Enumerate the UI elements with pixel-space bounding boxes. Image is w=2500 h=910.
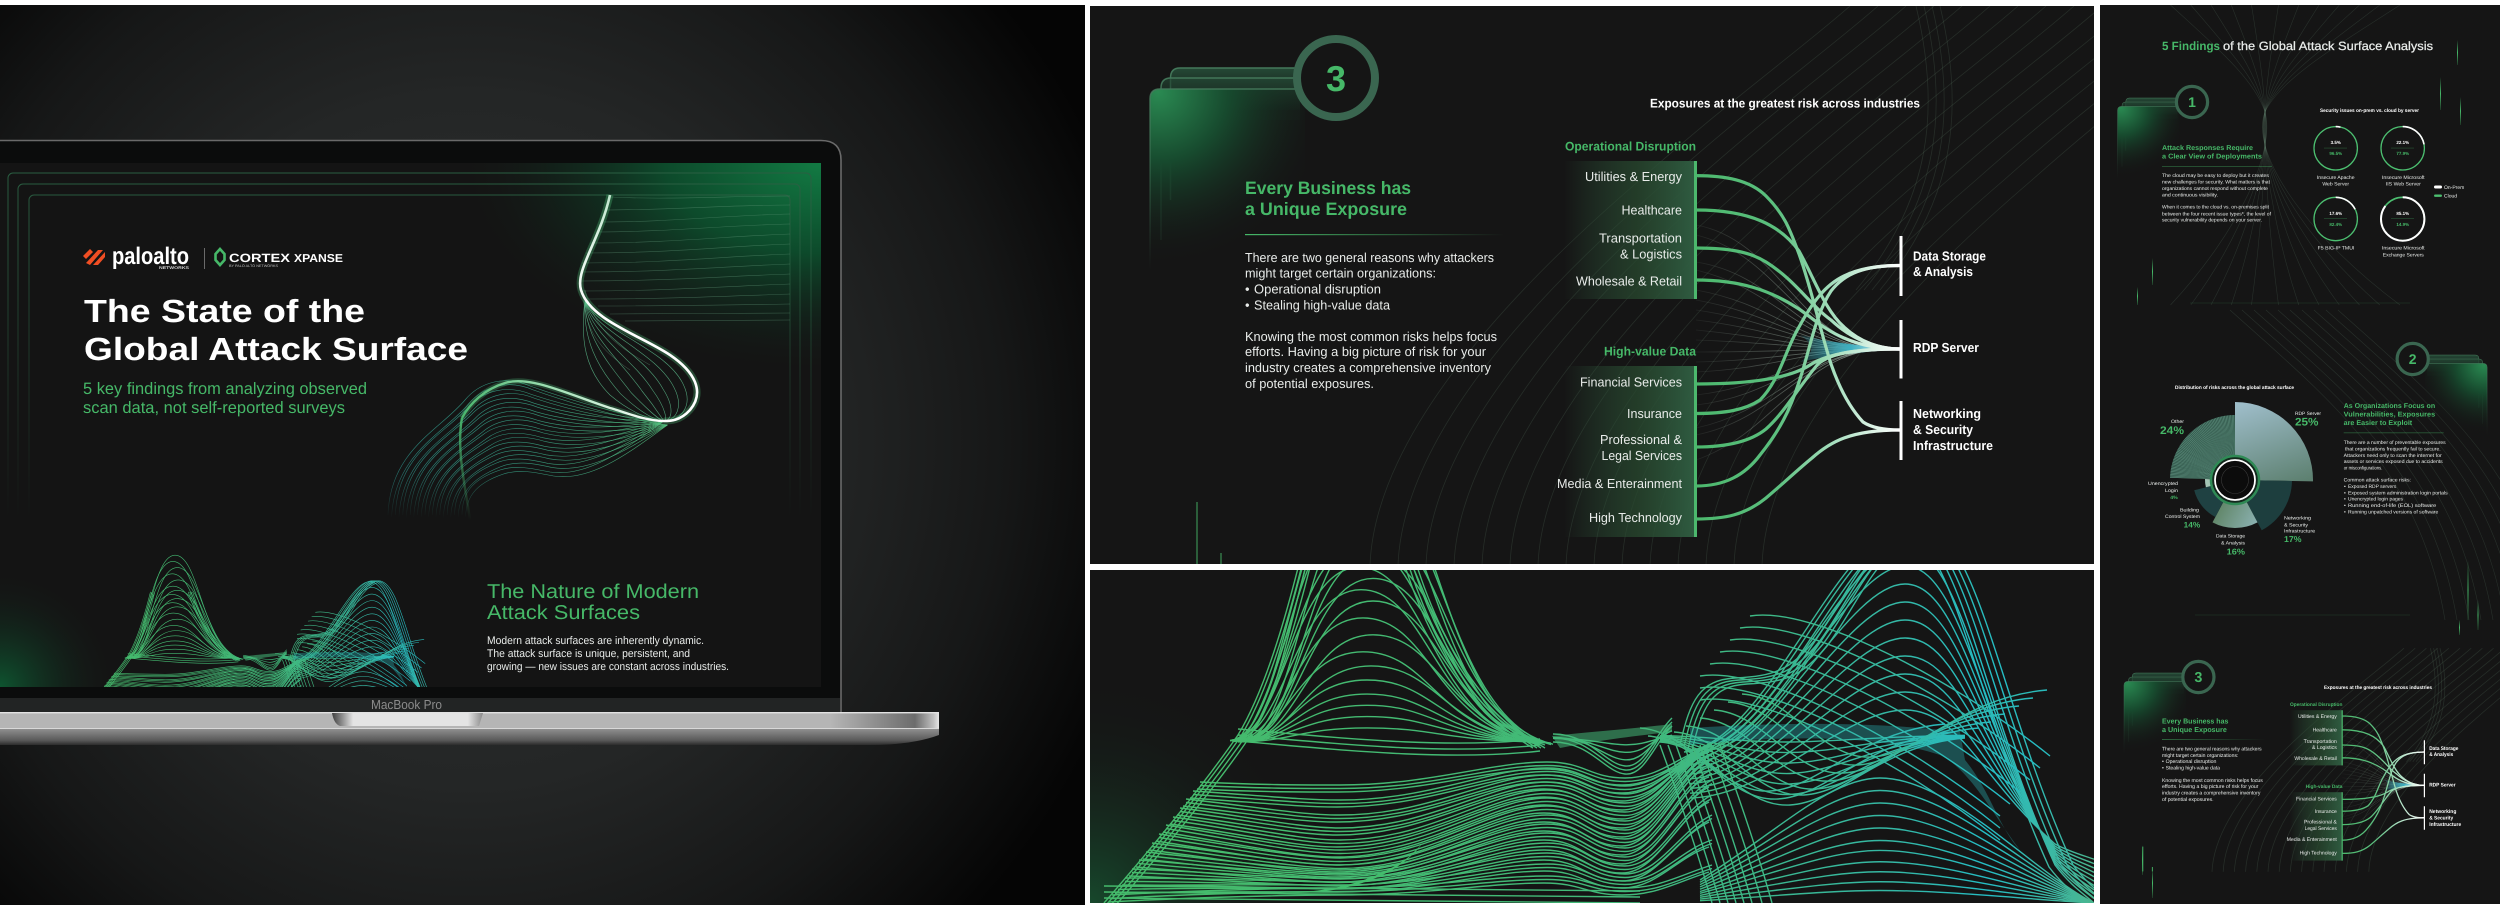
polar label: data storage [2216, 534, 2246, 556]
heading: every business: a Unique Exposure [1245, 199, 1407, 219]
exposure labels: Data Storage [1913, 248, 1986, 264]
polar label: unencrypted login: 4% [2170, 495, 2179, 501]
number 2: 2 [2409, 351, 2417, 367]
laptop lid [0, 140, 841, 714]
logo: cortex xpanse: CORTEX [229, 251, 290, 265]
subtitle [83, 380, 367, 417]
finding 2 body [2344, 440, 2448, 515]
finding 2 body: that organizations frequently fail to secure. [2345, 447, 2441, 453]
logo: paloalto networks: NETWORKS [159, 265, 189, 270]
finding 3 text in summary: Media & Enterainment [2287, 836, 2337, 842]
polar label: other: Other [2171, 419, 2184, 425]
legend: Cloud [2444, 194, 2457, 200]
heading: every business [1245, 178, 1411, 219]
finding 2 body: Unencrypted login pages [2348, 497, 2403, 503]
finding 2 divider [2344, 432, 2444, 434]
donut: apache: Insecure Apache [2317, 175, 2355, 181]
title: The State of the [84, 293, 365, 329]
exposure labels: RDP Server [1913, 340, 1979, 355]
laptop base [0, 712, 939, 745]
finding 2 body: Common attack surface risks: [2344, 478, 2411, 484]
finding 3 text in summary: & Logistics [2312, 744, 2337, 750]
number 1: 1 [2188, 94, 2196, 110]
faint background curves [1196, 6, 2094, 564]
nested screen frames [8, 172, 812, 482]
donut: iis [2381, 127, 2425, 188]
polar label: networking [2284, 516, 2315, 544]
finding 2 body: Running end-of-life (EOL) software [2348, 503, 2437, 509]
finding 1 body: security vulnerability depends on your server. [2162, 218, 2262, 224]
finding 2 body: There are a number of preventable exposures [2344, 440, 2446, 446]
finding 1 body: organizations cannot respond without complete [2162, 186, 2268, 192]
finding 1 body: The cloud may be easy to deploy but it creates [2162, 173, 2270, 179]
polar label: unencrypted login [2148, 481, 2179, 501]
industry labels: high-value data: Professional & [1600, 432, 1682, 447]
logo: cortex xpanse: BY PALO ALTO NETWORKS [229, 264, 279, 268]
heading: every business: Every Business has [1245, 178, 1411, 198]
finding 3 text in summary: Exposures at the greatest risk across industries [2324, 684, 2432, 690]
industry labels: operational disruption: Utilities & Energy [1585, 169, 1682, 184]
finding 2 body: Attackers need only to scan the internet for [2344, 453, 2442, 459]
summary title: 5 Findings [2162, 39, 2220, 53]
body text: of potential exposures. [1245, 376, 1374, 391]
finding 3 text in summary: Stealing high-value data [2166, 765, 2220, 771]
logo: cortex xpanse: XPANSE [294, 253, 343, 265]
logo: cortex xpanse [216, 249, 343, 268]
divider [1245, 234, 1503, 235]
donut: f5: F5 BIG-IP TMUI [2318, 246, 2354, 252]
vertical accent lines [2137, 40, 2478, 898]
finding 3 text in summary: High-value Data [2306, 784, 2343, 789]
body text: might target certain organizations: [1245, 266, 1436, 280]
polar label: other: 24% [2160, 425, 2184, 437]
finding 3 text in summary: • [2162, 765, 2164, 771]
donut charts title: Security issues on-prem vs. cloud by server [2320, 108, 2419, 114]
body text: nature of attack surfaces: Modern attack surfaces are inherently dynamic. [487, 635, 704, 647]
heading: nature of modern attack surfaces: The Nature of Modern [487, 581, 699, 603]
finding 3 text in summary: Utilities & Energy [2298, 713, 2337, 719]
summary title continuation: of the Global Attack Surface Analysis [2223, 39, 2433, 53]
finding 3 text in summary: & Analysis [2429, 751, 2453, 757]
industry labels: high-value data [1557, 374, 1682, 525]
polar label: building control system: Control System [2165, 514, 2200, 520]
polar label: building control system: 14% [2184, 521, 2200, 530]
finding 1 heading [2162, 144, 2262, 160]
finding 3 text in summary: Insurance [2315, 808, 2337, 814]
polar label: rdp server: RDP Server [2295, 411, 2321, 417]
finding 3 text in summary: efforts. Having a big picture of risk for your [2162, 783, 2259, 789]
donut: iis: 22.1% [2396, 140, 2409, 145]
finding 2 body: Exposed system administration login portals [2348, 490, 2448, 496]
donut: iis: Insecure Microsoft [2382, 175, 2425, 181]
donut: iis: 77.9% [2396, 151, 2409, 156]
ribbon wave art [380, 195, 790, 522]
body text: industry creates a comprehensive inventory [1245, 360, 1491, 375]
body text: • [1245, 282, 1250, 296]
mountain wave art on screen [79, 555, 448, 719]
donut: apache: 3.5% [2331, 140, 2341, 145]
finding 2 body: • [2344, 490, 2346, 496]
donut: f5 [2314, 197, 2357, 252]
finding 3 text in summary: Healthcare [2313, 727, 2337, 733]
polar label: rdp server [2295, 411, 2321, 428]
finding 3 art in summary [2124, 648, 2500, 872]
polar label: networking: 17% [2284, 534, 2302, 544]
finding 3 text in summary: There are two general reasons why attackers [2162, 746, 2262, 752]
polar label: unencrypted login: Unencrypted [2148, 481, 2178, 487]
subtitle: scan data, not self-reported surveys [83, 399, 345, 417]
group label: operational disruption: Operational Disruption [1565, 140, 1696, 154]
finding 3 text in summary: Operational disruption [2166, 758, 2216, 764]
finding 1 divider [2162, 166, 2272, 167]
industry labels: operational disruption: & Logistics [1620, 246, 1682, 262]
body text: efforts. Having a big picture of risk for your [1245, 344, 1487, 359]
finding 2 heading: As Organizations Focus on [2344, 402, 2435, 410]
finding 2 body: Exposed RDP servers [2348, 484, 2397, 490]
finding 1 heading: Attack Responses Require [2162, 144, 2253, 152]
industry labels: operational disruption: Healthcare [1622, 202, 1682, 218]
exposure labels: & Analysis [1913, 264, 1973, 279]
body text: There are two general reasons why attackers [1245, 250, 1494, 265]
finding 2 cards and ring [2397, 343, 2487, 448]
sankey chart [1564, 161, 1901, 537]
finding 3 text in summary: High Technology [2300, 850, 2337, 856]
finding 3 text in summary: Data Storage [2429, 745, 2458, 751]
body text: nature of attack surfaces: The attack surface is unique, persistent, and [487, 648, 690, 660]
polar chart [2170, 402, 2313, 530]
industry labels: high-value data: Insurance [1627, 406, 1682, 421]
finding 2 body: • [2344, 503, 2346, 509]
finding 1 body: new challenges for security. What matters is that [2162, 180, 2271, 186]
exposure labels [1913, 248, 1993, 453]
finding 3 text in summary: Financial Services [2296, 796, 2337, 802]
polar label: data storage: & Analysis [2221, 540, 2246, 546]
industry labels: high-value data: Legal Services [1602, 448, 1682, 463]
finding 3 text in summary: Operational Disruption [2290, 702, 2342, 707]
body text: • [1245, 298, 1250, 312]
finding 3 text in summary: Legal Services [2305, 825, 2337, 831]
finding 1 body: When it comes to the cloud vs. on-premises split [2162, 205, 2270, 211]
donut: apache: Web Server [2322, 182, 2349, 188]
finding 2 body: or misconfigurations. [2344, 466, 2382, 472]
finding 2 body: • [2344, 484, 2346, 490]
logo divider [204, 248, 205, 269]
donut: exchange: 85.1% [2396, 211, 2409, 216]
finding 3 text in summary [2162, 669, 2461, 856]
polar label: data storage: Data Storage [2216, 534, 2245, 540]
polar label: rdp server: 25% [2295, 416, 2319, 428]
industry labels: high-value data: High Technology [1589, 510, 1682, 525]
finding 3 text in summary: 3 [2194, 669, 2202, 685]
subtitle: 5 key findings from analyzing observed [83, 380, 367, 398]
body text: Operational disruption [1254, 282, 1381, 296]
panel: laptop mockup [0, 5, 1085, 905]
finding 3 text in summary: a Unique Exposure [2162, 725, 2227, 733]
heading: nature of modern attack surfaces: Attack Surfaces [487, 602, 640, 624]
heading: nature of modern attack surfaces [487, 584, 698, 620]
finding 1 body: between the four recent issue types*, the level of [2162, 211, 2272, 217]
donut: apache [2314, 127, 2357, 188]
donut: apache: 96.5% [2329, 151, 2342, 156]
donut: f5: 82.4% [2329, 222, 2342, 227]
industry labels: high-value data: Media & Enterainment [1557, 476, 1682, 491]
finding 2 body: assets or services exposed due to accidents [2344, 459, 2443, 465]
polar label: networking: & Security [2284, 522, 2309, 528]
finding 1 body: and continuous visibility. [2162, 193, 2218, 199]
finding 3 text in summary: Infrastructure [2429, 821, 2461, 827]
finding 3 text in summary: RDP Server [2429, 782, 2456, 788]
finding 3 text in summary: Transportation [2304, 738, 2337, 744]
panel: large wave art [1090, 570, 2094, 903]
finding 1 body [2162, 173, 2272, 224]
polar chart title: Distribution of risks across the global attack surface [2175, 385, 2294, 391]
donut: exchange [2381, 197, 2425, 258]
finding 1 cards and ring [2117, 84, 2210, 172]
polar label: networking: Infrastructure [2284, 528, 2315, 534]
title: Global Attack Surface [84, 331, 468, 367]
polar label: other [2160, 419, 2184, 437]
donut: exchange: Insecure Microsoft [2382, 246, 2425, 252]
polar label: unencrypted login: Login [2165, 488, 2178, 494]
finding 3 text in summary: Professional & [2304, 819, 2337, 825]
donut: exchange: 14.9% [2396, 222, 2409, 227]
finding 3 text in summary: of potential exposures. [2162, 796, 2214, 802]
industry labels: operational disruption: Transportation [1599, 230, 1682, 246]
laptop screen [0, 163, 821, 719]
finding 2 heading: Vulnerabilities, Exposures [2344, 411, 2435, 419]
finding 3 text in summary: & Security [2429, 815, 2453, 821]
laptop chin [0, 698, 840, 713]
polar label: building control system: Building [2180, 508, 2199, 514]
chart title: Exposures at the greatest risk across industries [1650, 96, 1920, 110]
finding 2 heading: are Easier to Exploit [2344, 419, 2413, 427]
donut: iis: IIS Web Server [2386, 182, 2421, 188]
finding 2 heading [2344, 402, 2435, 427]
finding 2 body: Running unpatched versions of software [2348, 509, 2439, 515]
finding 2 body: • [2344, 497, 2346, 503]
body text: Stealing high-value data [1254, 298, 1391, 312]
body text: nature of attack surfaces [487, 635, 729, 673]
industry labels: high-value data: Financial Services [1580, 374, 1682, 390]
finding 1 heading: a Clear View of Deployments [2162, 152, 2262, 160]
polar label: networking: Networking [2284, 516, 2311, 522]
legend: On-Prem [2444, 185, 2464, 191]
exposure labels: Networking [1913, 406, 1981, 421]
industry labels: operational disruption [1576, 169, 1682, 288]
finding 3 text in summary: Networking [2429, 808, 2456, 814]
logo: paloalto networks: paloalto [112, 243, 189, 270]
body text: nature of attack surfaces: growing — new issues are constant across industries. [487, 661, 729, 673]
legend [2434, 185, 2464, 200]
exposure labels: Infrastructure [1913, 438, 1993, 453]
finding 3 text in summary: might target certain organizations: [2162, 752, 2238, 758]
laptop brand label: MacBook Pro [371, 697, 442, 712]
group label: high-value data: High-value Data [1604, 344, 1697, 358]
finding 3 text in summary: industry creates a comprehensive inventory [2162, 790, 2261, 796]
donut: exchange: Exchange Servers [2383, 252, 2424, 258]
donut: f5: 17.6% [2329, 211, 2342, 216]
number 3: 3 [1326, 58, 1346, 99]
finding 3 text in summary: Wholesale & Retail [2294, 755, 2337, 761]
faint summary background curves [2170, 5, 2500, 620]
exposure labels: & Security [1913, 422, 1974, 437]
title [84, 298, 467, 360]
industry labels: operational disruption: Wholesale & Retail [1576, 274, 1682, 288]
finding 3 text in summary: Knowing the most common risks helps focus [2162, 777, 2263, 783]
finding 3 text in summary: • [2162, 758, 2164, 764]
polar label: building control system [2165, 508, 2200, 530]
finding 3 cards and ring [1149, 35, 1379, 255]
body text: Knowing the most common risks helps focus [1245, 329, 1497, 344]
panel: summary of findings [2100, 5, 2500, 904]
panel: exposures by industry [1090, 6, 2094, 564]
finding 2 body: • [2344, 509, 2346, 515]
body text [1245, 250, 1497, 391]
polar label: data storage: 16% [2227, 546, 2245, 556]
logo: paloalto networks [83, 246, 189, 269]
finding 3 text in summary: Every Business has [2162, 717, 2228, 725]
